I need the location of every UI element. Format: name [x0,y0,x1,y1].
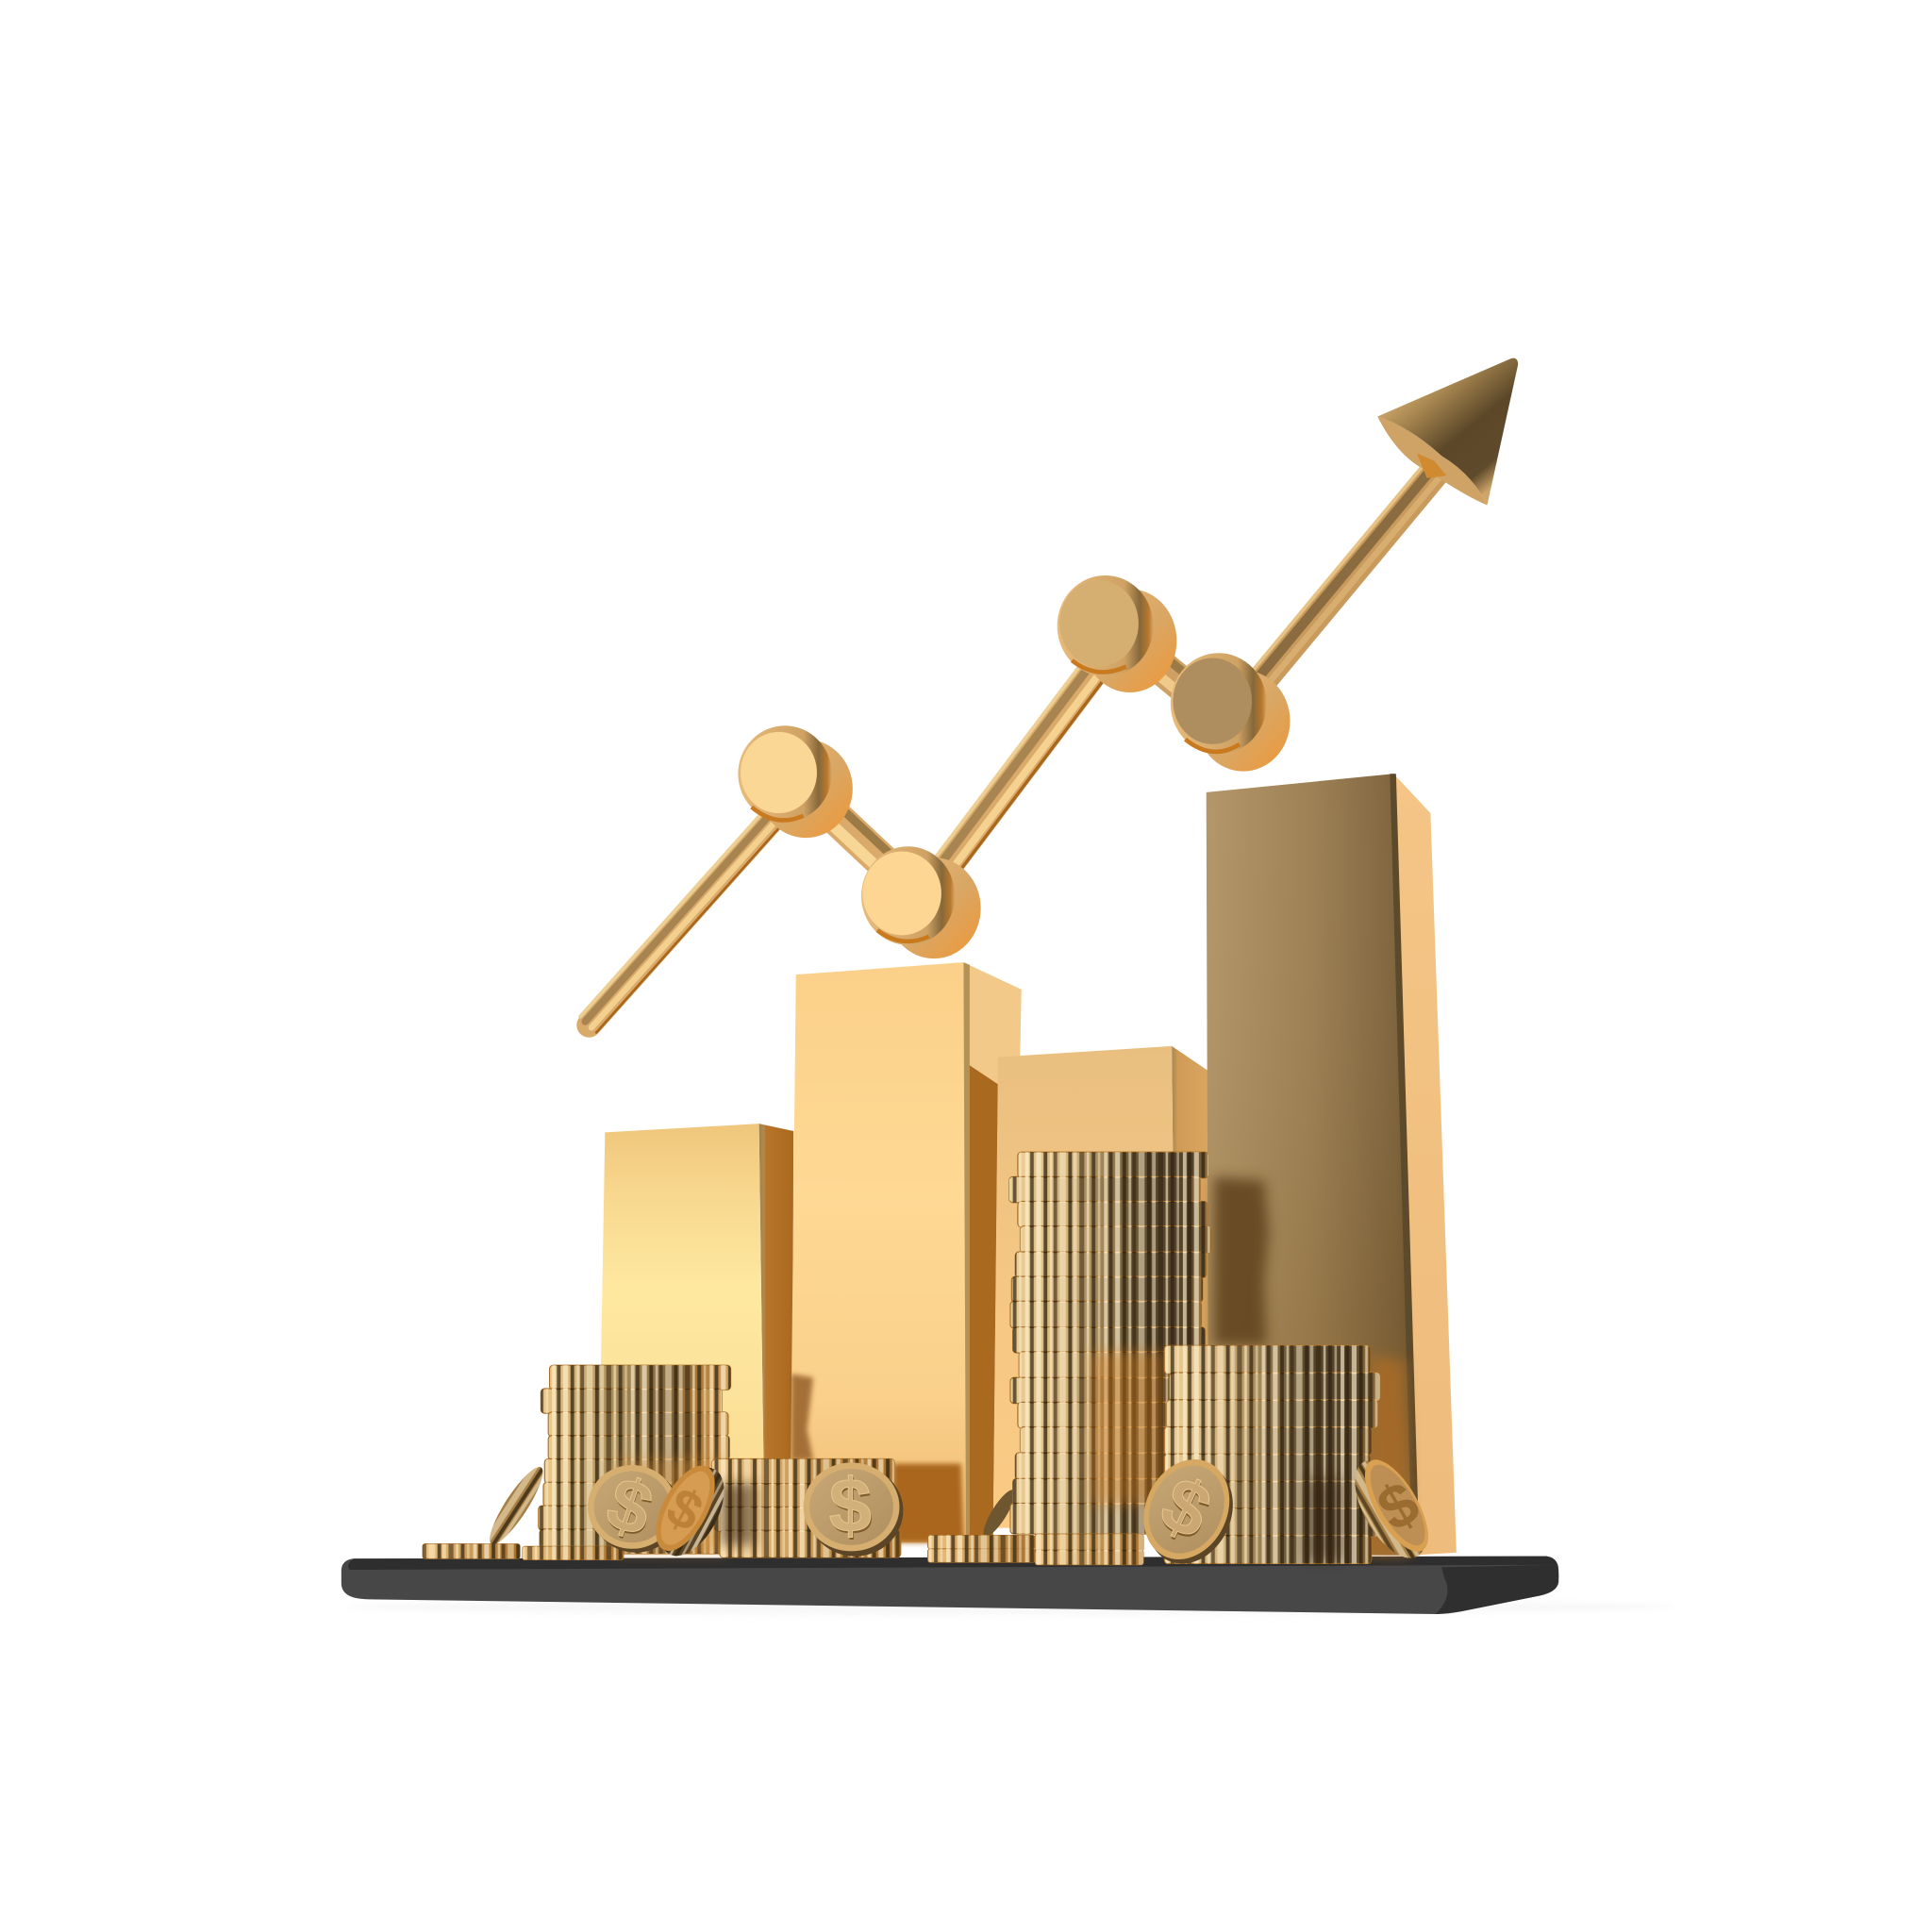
tilted dollar coin 5 [1341,1448,1441,1569]
bar 3 [993,1046,1212,1528]
trend line: fifth rod [1252,459,1444,684]
data point node 2 [861,846,981,958]
dark platform base [341,1557,1558,1614]
dollar coin 1: $ [598,1462,663,1555]
data point node 3 [1058,575,1176,692]
dollar coin 4: $ [1149,1460,1223,1556]
tilted dollar coin 5: $ [1366,1468,1430,1544]
dollar coin 4: $ [1149,1463,1223,1558]
trend line: fourth rod [1136,643,1205,704]
coin stack: left tall [539,1365,731,1555]
loose flat coins [423,1534,1143,1565]
tilted dollar coin 2 [643,1456,738,1566]
coin stack: tall centre [1009,1152,1211,1534]
coin stack: low centre [709,1458,901,1557]
dollar coin 3: $ [830,1466,873,1551]
dollar coin 1 [588,1460,680,1555]
dollar coin 4 [1126,1445,1250,1578]
arrow head cone [1377,358,1518,506]
dollar coin 1: $ [597,1460,662,1552]
platform shadow [345,1598,1675,1615]
bar 4 [1207,774,1457,1555]
bar 2 [790,962,1022,1542]
data point node 1 [738,725,853,838]
data point node 4 [1171,653,1291,772]
leaning coin at far left [482,1461,550,1550]
trend line: third rod [933,661,1106,877]
dollar coin 3 [804,1462,903,1557]
coin stack: right [1164,1345,1380,1563]
trend line: second rod [813,793,907,883]
tilted dollar coin 2: $ [657,1476,712,1543]
bar 1 [599,1124,793,1491]
dollar coin 3: $ [829,1464,872,1549]
trend line: first rod [580,809,781,1033]
leaning coin behind tall stack [978,1486,1020,1540]
